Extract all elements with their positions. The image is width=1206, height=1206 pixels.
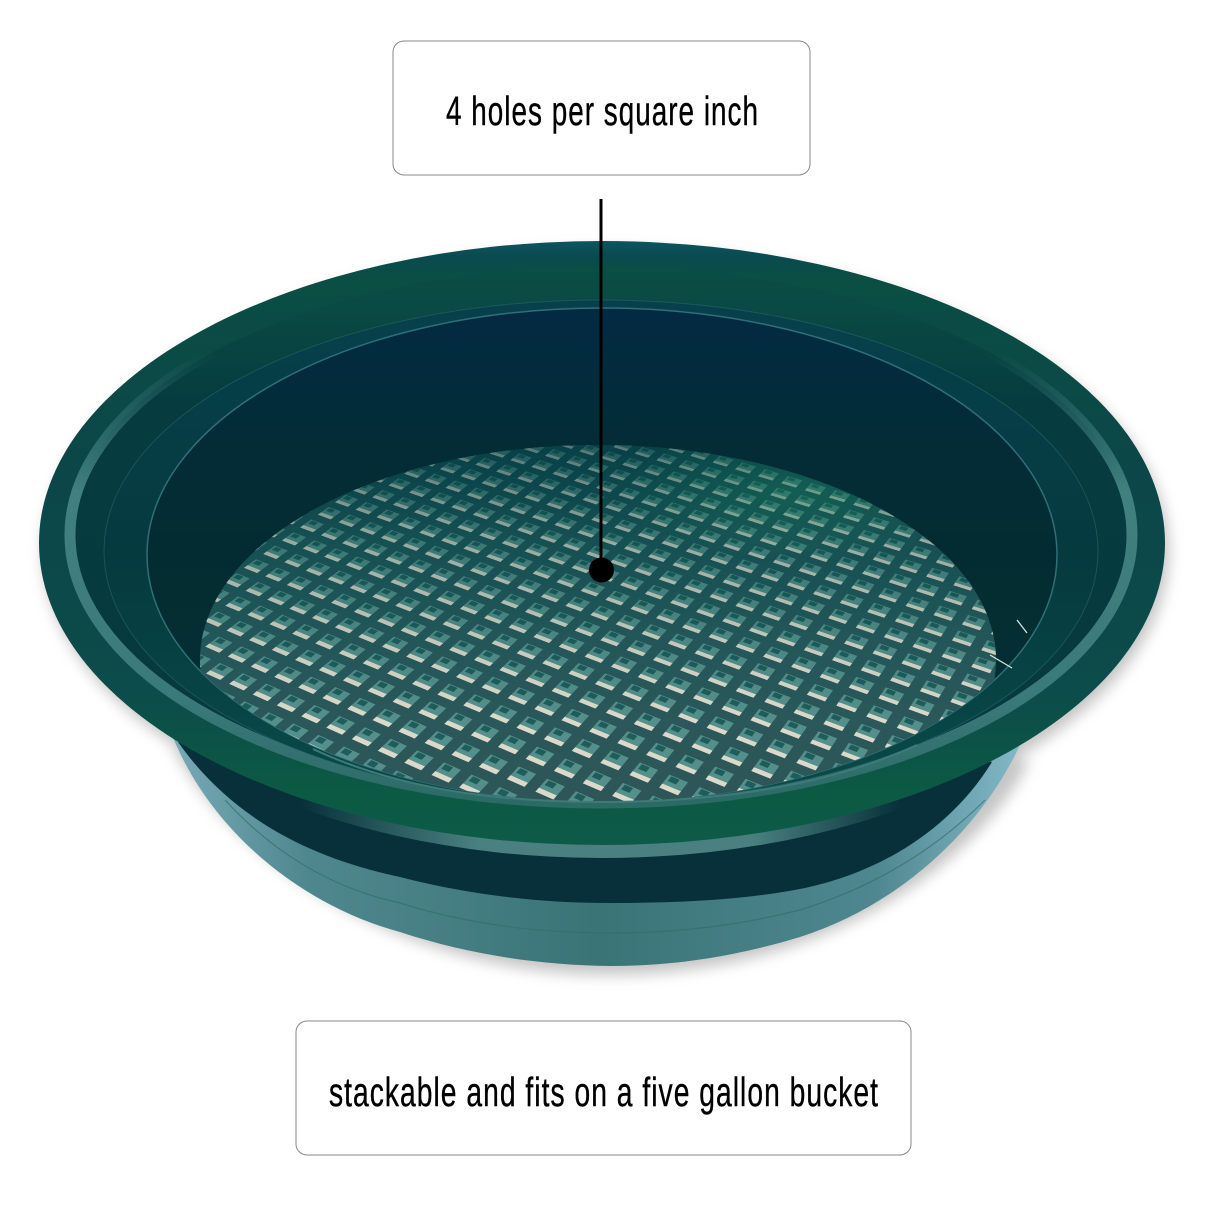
mesh green glow: [676, 455, 895, 532]
rim highlight: [70, 267, 1132, 803]
mesh holes in perspective: [200, 445, 996, 801]
lower sieve outer wall: [172, 700, 1020, 966]
callout: 4 holes per square inch: [393, 41, 810, 175]
lower sieve pale strip under the rim: [57, 256, 1147, 858]
lower sieve moulding seam: [225, 800, 985, 933]
wall glints: [990, 620, 1027, 668]
outer rim: [39, 241, 1165, 845]
rim edge over mesh: [313, 745, 917, 802]
lower stacked sieve: [57, 256, 1147, 966]
mesh top shade: [200, 445, 996, 692]
drop shadow: [43, 249, 1169, 975]
pointer line and dot: [589, 199, 614, 582]
callout: 4 holes per square inch: 4 holes per square inch: [446, 88, 759, 134]
upper sieve rim: [39, 241, 1165, 845]
mesh screen floor: [200, 445, 996, 801]
callout: stackable: stackable and fits on a five gallon bucket: [329, 1069, 879, 1115]
inner wall: [147, 308, 1057, 802]
lower sieve dark gap: [178, 700, 992, 903]
inner shelf: [104, 300, 1098, 802]
callout: stackable: [296, 1021, 911, 1155]
